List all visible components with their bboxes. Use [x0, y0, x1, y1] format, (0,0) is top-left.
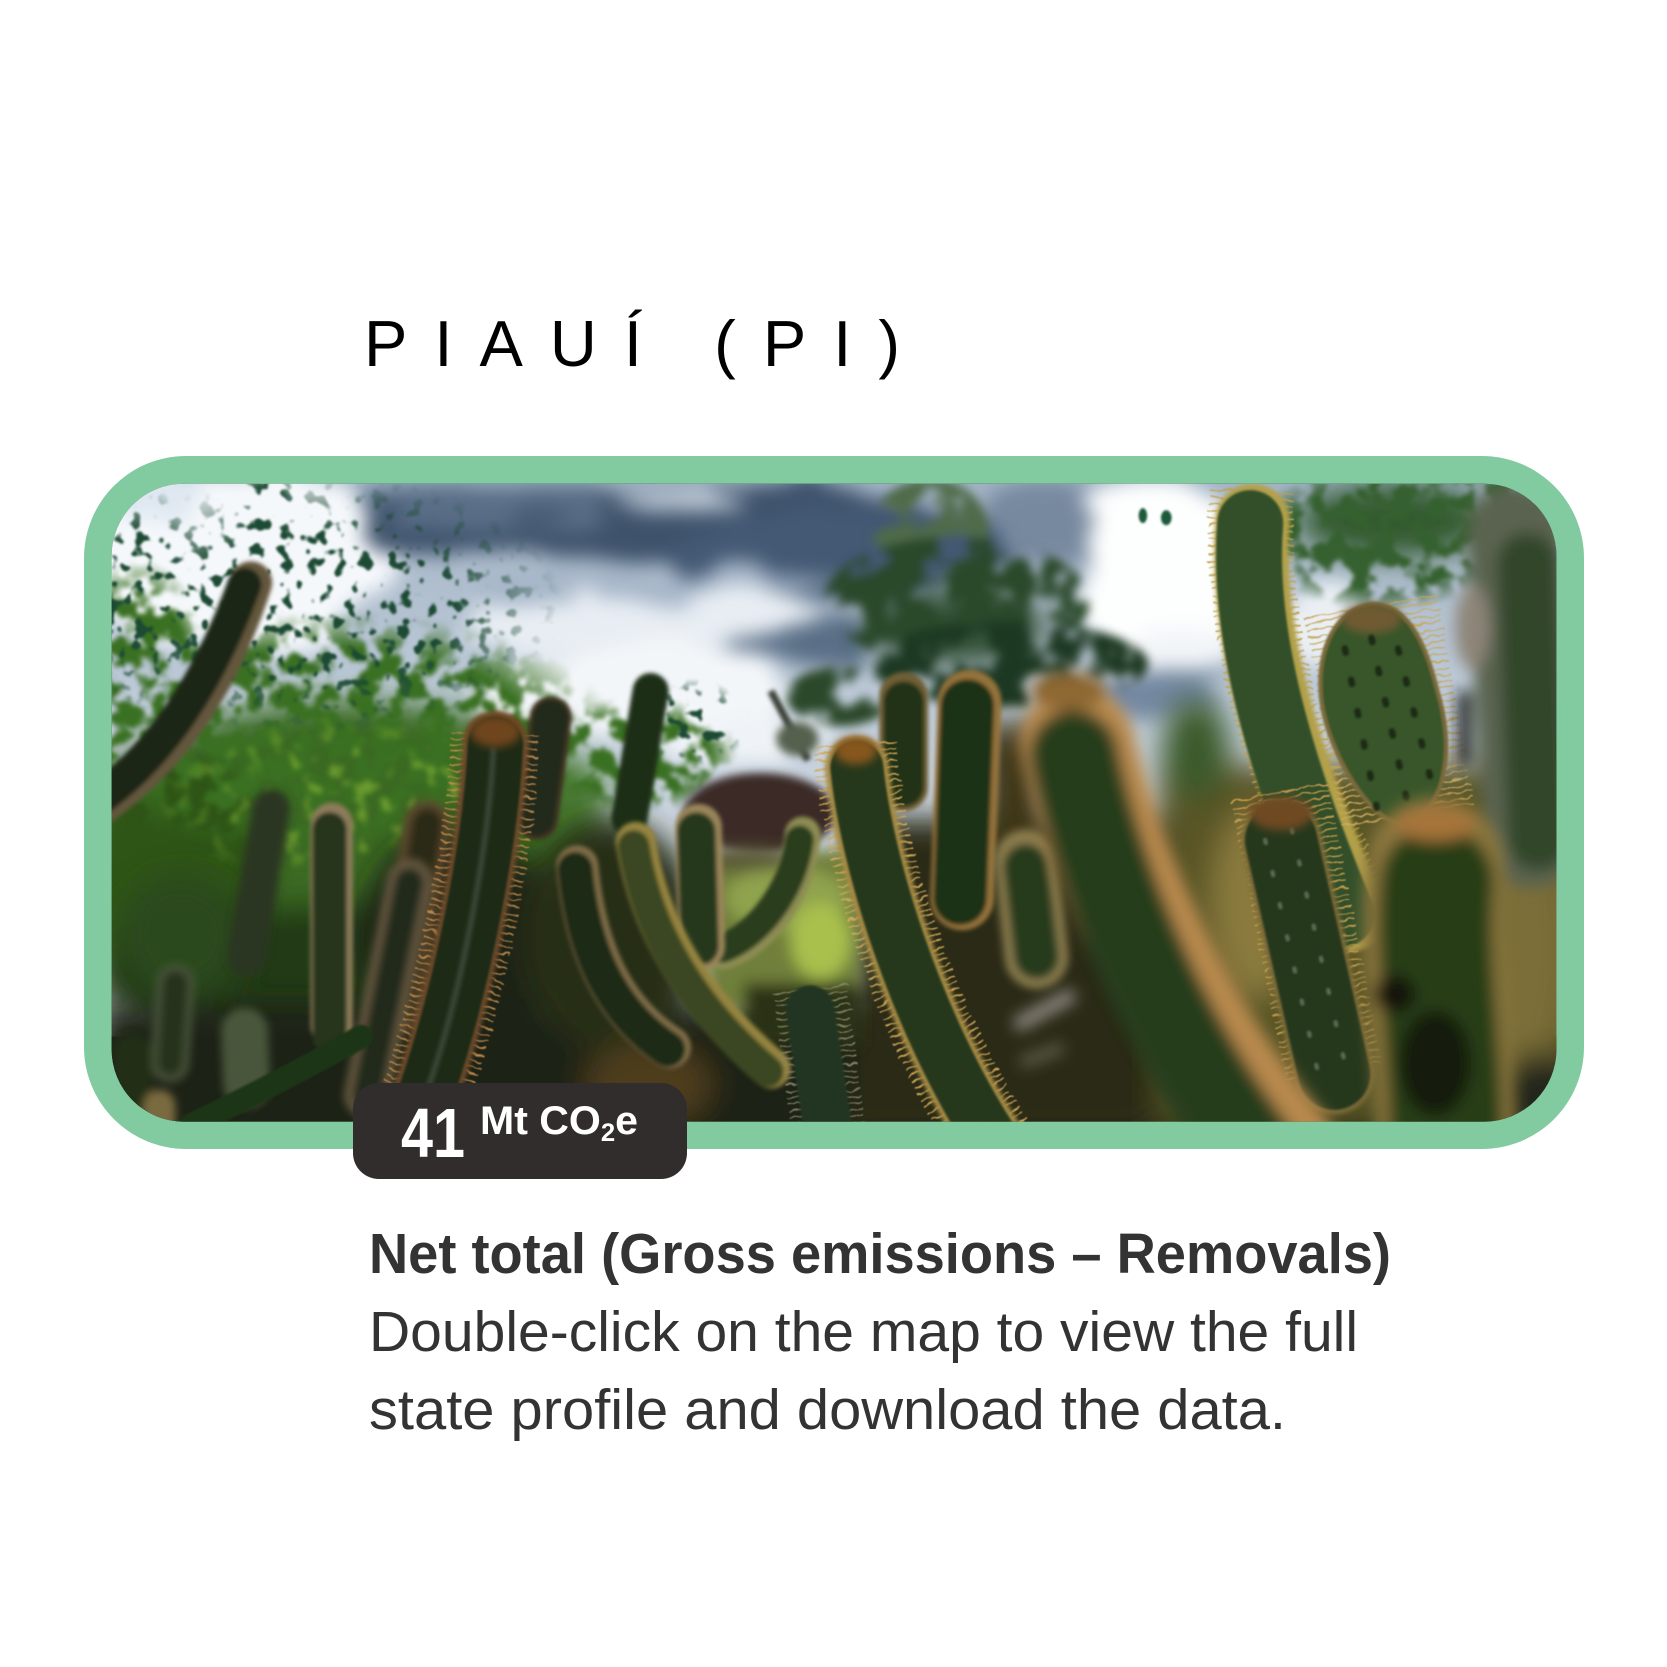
value badge — [353, 1083, 687, 1179]
shrub dark twig leaves — [112, 484, 740, 766]
cactus: far upper-left arm — [101, 583, 251, 803]
shrub mid leaves — [112, 562, 738, 835]
sky with clouds — [64, 468, 1556, 1037]
mid-ground tones — [96, 698, 1584, 1143]
description text — [369, 1222, 1391, 1442]
cactus: tall right stem — [1249, 491, 1350, 914]
value unit: Mt CO — [480, 1099, 598, 1143]
photo frame: green rounded border — [84, 456, 1584, 1149]
background tree — [787, 478, 1148, 726]
cactus: large blurred foreground — [1015, 672, 1281, 1154]
cactus: curved arm — [723, 835, 803, 952]
value number: 41 — [401, 1094, 465, 1172]
background cacti row — [101, 583, 1037, 1127]
cactus: blurred stem — [1026, 861, 1037, 957]
cactus: long olive stem — [634, 842, 771, 1072]
value unit: 2 — [601, 1119, 615, 1147]
cactus: dark blurred foreground right — [1374, 807, 1476, 1143]
cactus: rear stem — [537, 718, 551, 819]
cactus: curved stem — [575, 866, 670, 1049]
cactus: dark stem centre-right — [960, 702, 970, 898]
cactus: upright stem centre-left — [629, 691, 651, 819]
cactus: plump stem upper right — [1320, 604, 1446, 824]
top right foliage — [1278, 484, 1552, 609]
value unit: e — [615, 1099, 638, 1143]
cactus: main foreground left with spines — [425, 715, 521, 1095]
shrub soft base — [74, 702, 606, 1053]
cactus: rear stem above centre — [881, 696, 927, 787]
sunlit grass patch — [691, 846, 861, 1047]
green shrub foliage on the left — [112, 484, 740, 1029]
description line one: Double-click on the map to view the full — [369, 1300, 1358, 1364]
cactus: soft stem behind main — [367, 824, 427, 1095]
description line two: state profile and download the data. — [369, 1378, 1286, 1442]
description heading: Net total (Gross emissions – Removals) — [369, 1222, 1391, 1286]
title: PIAUÍ (PI) — [364, 307, 900, 380]
cactus: small blurred stems at far left — [133, 808, 271, 1127]
cactus: low horizontal stem — [191, 1037, 361, 1125]
cactus: vertical stem centre — [696, 827, 702, 946]
cactus: blurred far-right trunk — [1455, 532, 1538, 840]
cactus: tall stem left of centre — [330, 824, 332, 1037]
base fill for ground — [106, 478, 1563, 1127]
cactus: small front stem at bottom centre — [810, 989, 829, 1138]
cactus: sharp diagonal stem — [835, 737, 994, 1143]
small leaves in sky — [1139, 508, 1172, 525]
shrub bright leaves — [166, 718, 462, 866]
cactus: spotted mid-right stem — [1249, 792, 1345, 1074]
photo: cacti under a cloudy sky — [112, 484, 1556, 1122]
distant dark rock and post — [684, 691, 837, 854]
